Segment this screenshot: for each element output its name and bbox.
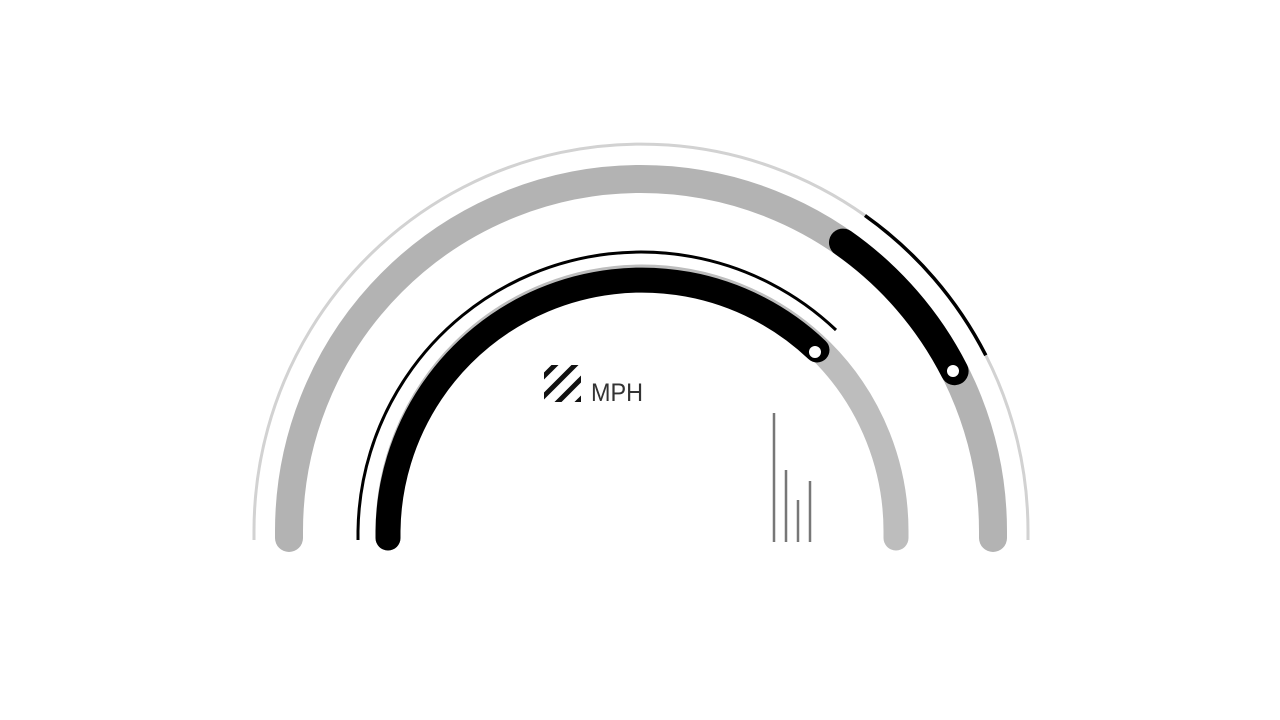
bar chart xyxy=(774,413,810,542)
icon: stripes xyxy=(544,365,581,402)
outer thin arc xyxy=(254,144,1028,540)
inner thin arc xyxy=(358,252,836,540)
outer gauge arc xyxy=(289,179,993,538)
inner gauge arc xyxy=(388,277,896,538)
label: MPH: MPH xyxy=(591,379,643,407)
